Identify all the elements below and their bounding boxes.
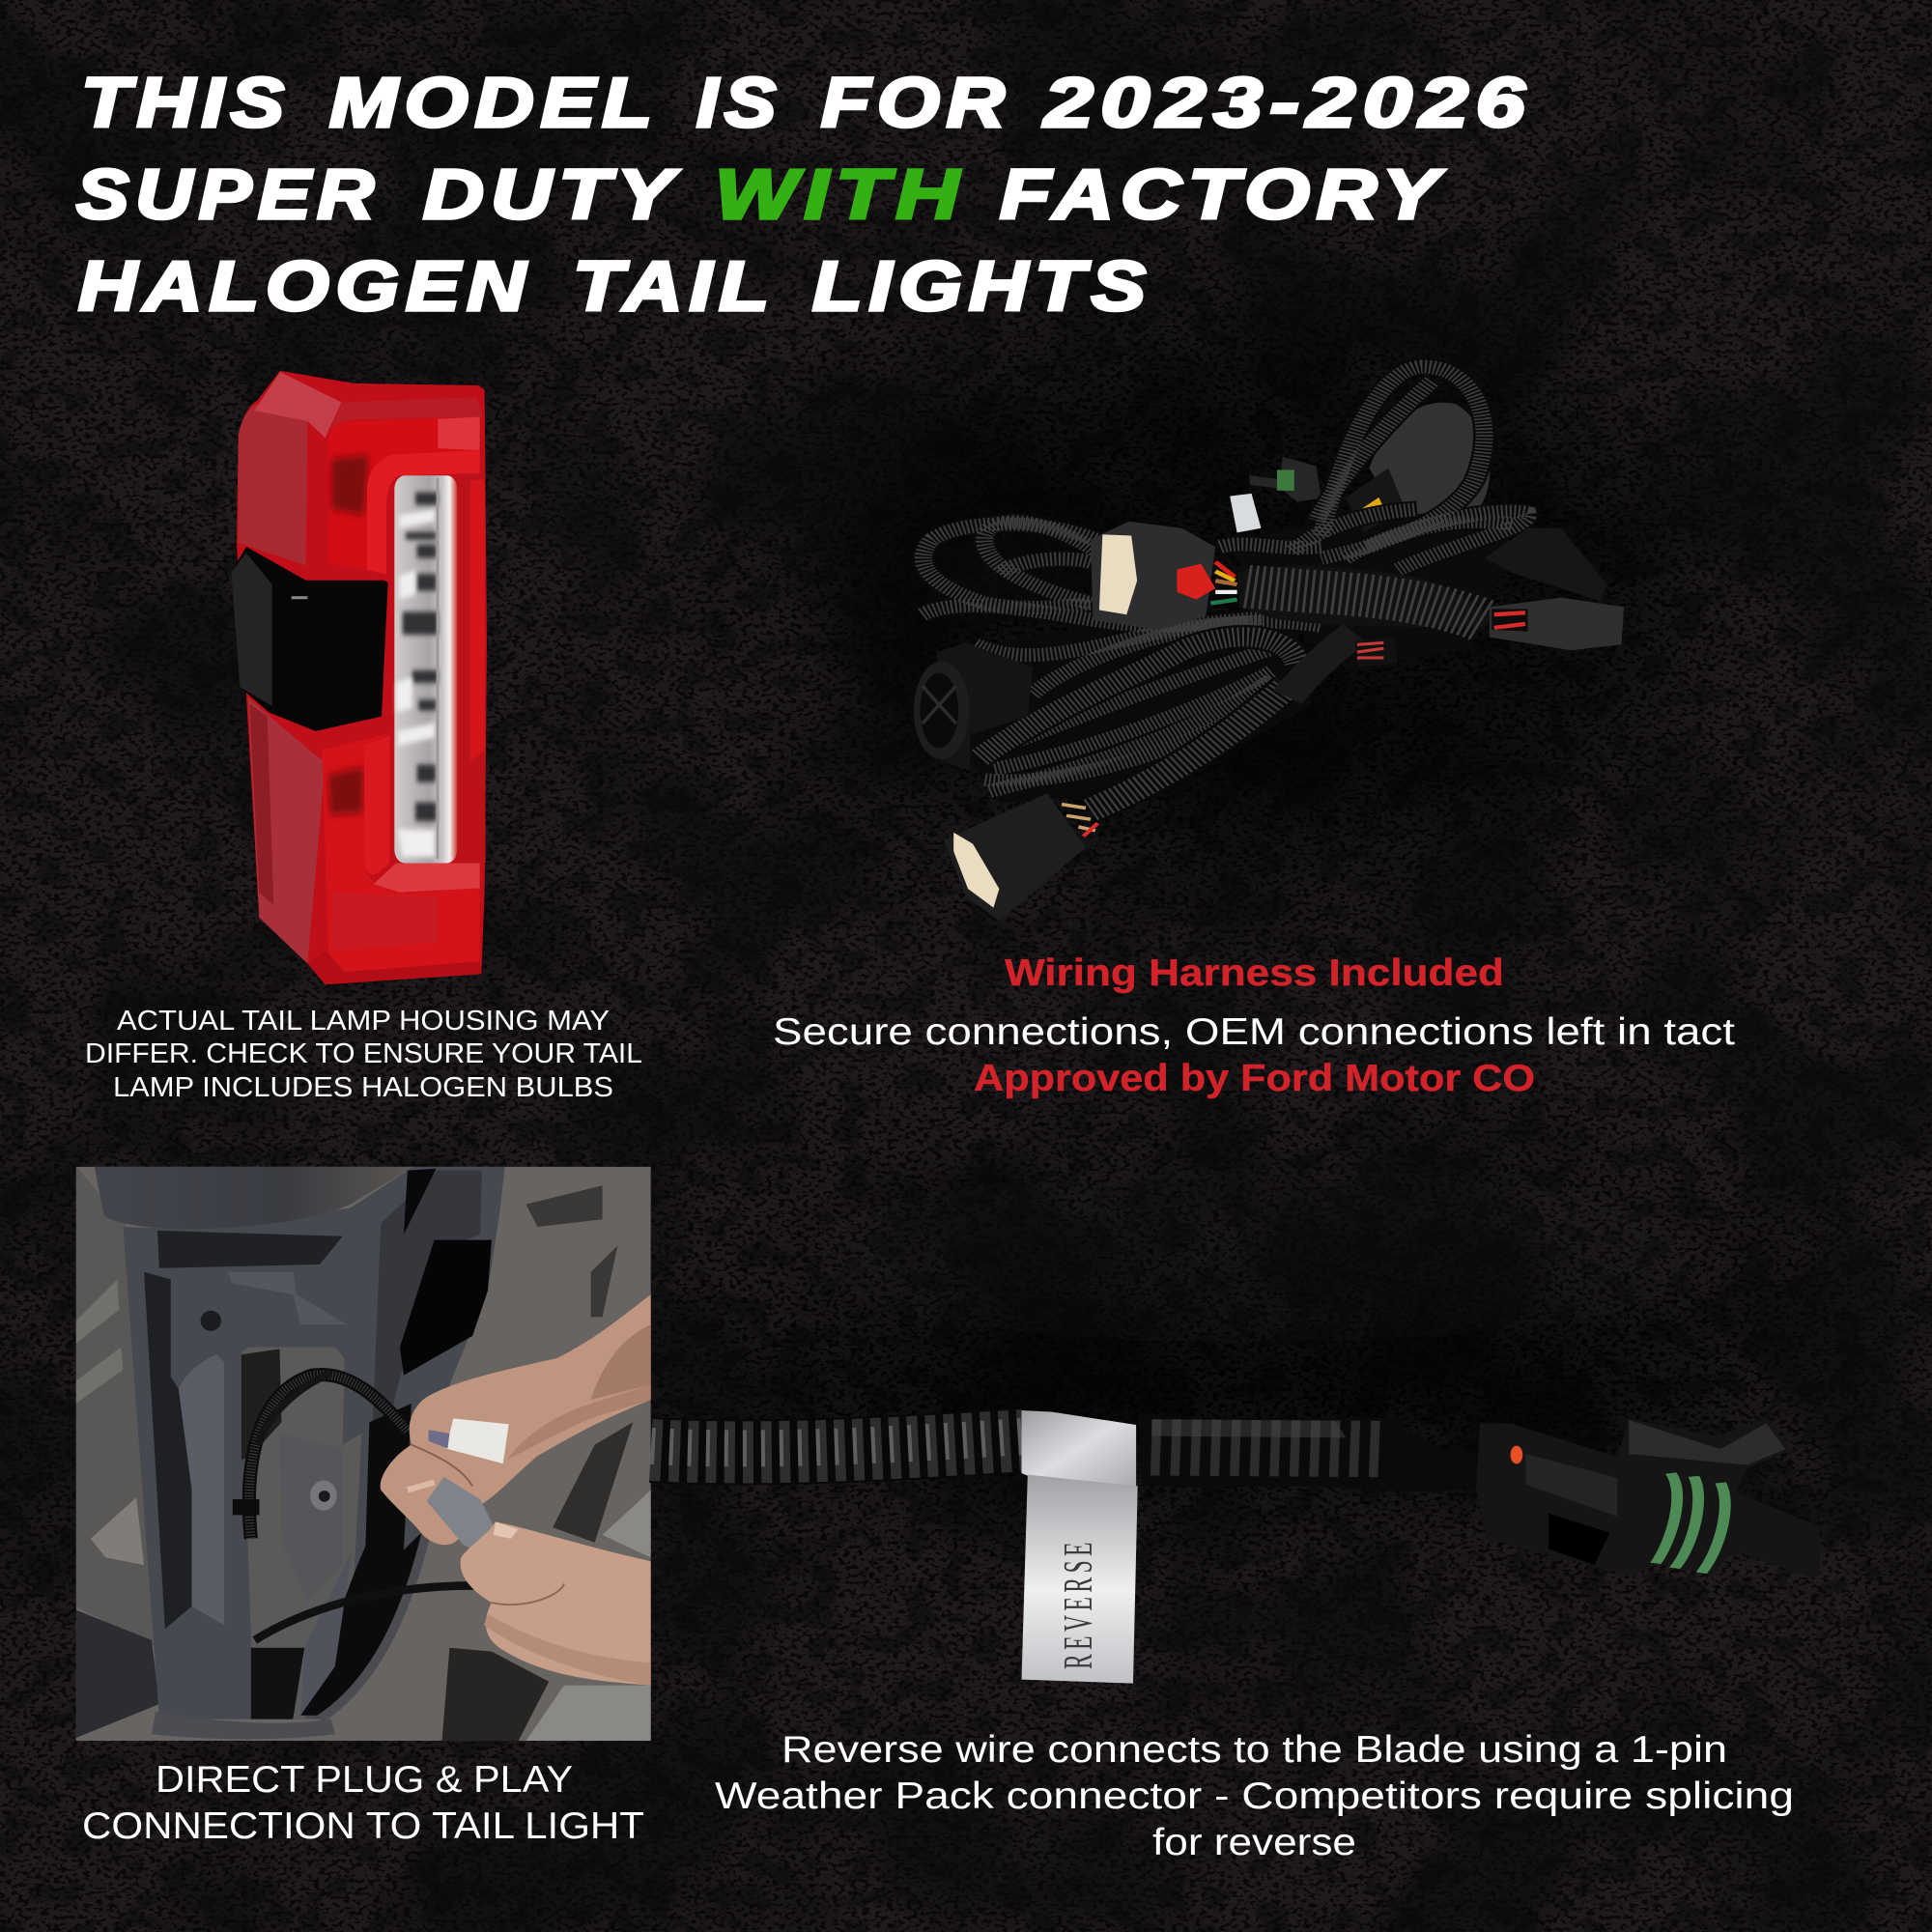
caption: reverse wire description: Reverse wire connects to the Blade using a 1-pin: [781, 1729, 1727, 1771]
caption: tail lamp housing note: ACTUAL TAIL LAMP HOUSING MAY: [117, 1006, 610, 1037]
vehicle wire: [249, 1374, 484, 1640]
white lens: [394, 475, 457, 863]
grey module: [1369, 403, 1490, 517]
title: DUTY: [423, 156, 680, 234]
round connector: [914, 642, 1033, 771]
title: TAIL: [573, 248, 776, 326]
lower hand: [461, 1521, 651, 1686]
right connector: [1490, 598, 1624, 650]
upper cap: [95, 1167, 413, 1229]
title: 2023-2026: [1041, 65, 1532, 142]
thick corrugated wires: [980, 637, 1297, 810]
caption: reverse wire description: Weather Pack connector - Competitors require splicing: [715, 1776, 1794, 1817]
upper hand: [381, 1294, 651, 1545]
harness heading and description: [773, 952, 1735, 1099]
install photo illustration: [76, 1167, 651, 1741]
left body panel: [76, 1167, 156, 1648]
tag: [1230, 494, 1261, 532]
harness heading and description: Secure connections, OEM connections left in tact: [773, 1011, 1735, 1053]
grey connector: [427, 1477, 549, 1580]
title: SUPER: [76, 156, 381, 234]
title: LIGHTS: [812, 248, 1152, 326]
harness heading and description: Approved by Ford Motor CO: [974, 1058, 1535, 1099]
inner opening: [242, 1347, 361, 1719]
black connector: [1476, 1418, 1820, 1577]
title: IS: [696, 65, 782, 142]
green seals: [1656, 1473, 1725, 1573]
caption: tail lamp housing note: DIFFER. CHECK TO ENSURE YOUR TAIL: [85, 1038, 642, 1069]
main sheath: [1237, 566, 1494, 697]
tape label text: REVERSE: [1057, 1538, 1101, 1669]
caption: tail lamp housing note: [85, 1006, 642, 1103]
bottom connector: [944, 793, 1097, 921]
column details: [179, 1354, 224, 1625]
small green connector: [1249, 457, 1321, 501]
main connector: [1091, 522, 1237, 630]
title: THIS: [81, 65, 291, 142]
tape flag: [1021, 1475, 1138, 1684]
title: FACTORY: [1000, 156, 1445, 234]
silver tape wrap: [1021, 1410, 1136, 1486]
caption: tail lamp housing note: LAMP INCLUDES HALOGEN BULBS: [113, 1072, 613, 1103]
steel door column: [123, 1167, 505, 1719]
caption: direct plug and play: CONNECTION TO TAIL LIGHT: [82, 1805, 644, 1847]
caption: reverse wire description: for reverse: [1152, 1822, 1356, 1863]
white connector: [429, 1418, 509, 1463]
harness heading and description: Wiring Harness Included: [1005, 952, 1504, 994]
upper right black connector: [1485, 528, 1607, 602]
tail lamp photo illustration: [231, 371, 487, 984]
caption: reverse wire description: [715, 1729, 1794, 1863]
black taped section: [1138, 1413, 1476, 1492]
black bracket: [231, 547, 388, 731]
wiring harness illustration: [914, 366, 1624, 921]
dark arch: [300, 1404, 423, 1716]
caption: direct plug and play: DIRECT PLUG & PLAY: [156, 1759, 573, 1801]
right body: [526, 1185, 617, 1317]
title: HALOGEN: [78, 248, 532, 326]
reverse wire illustration: [651, 1410, 1820, 1684]
title: WITH: [715, 156, 966, 234]
title: MODEL: [329, 65, 659, 142]
dark wire mass: [971, 618, 1312, 803]
corrugated tube: [651, 1436, 1024, 1452]
black rectangular opening: [400, 1240, 492, 1376]
title: [76, 65, 1532, 326]
title: FOR: [821, 65, 1011, 142]
caption: direct plug and play: [82, 1759, 644, 1847]
